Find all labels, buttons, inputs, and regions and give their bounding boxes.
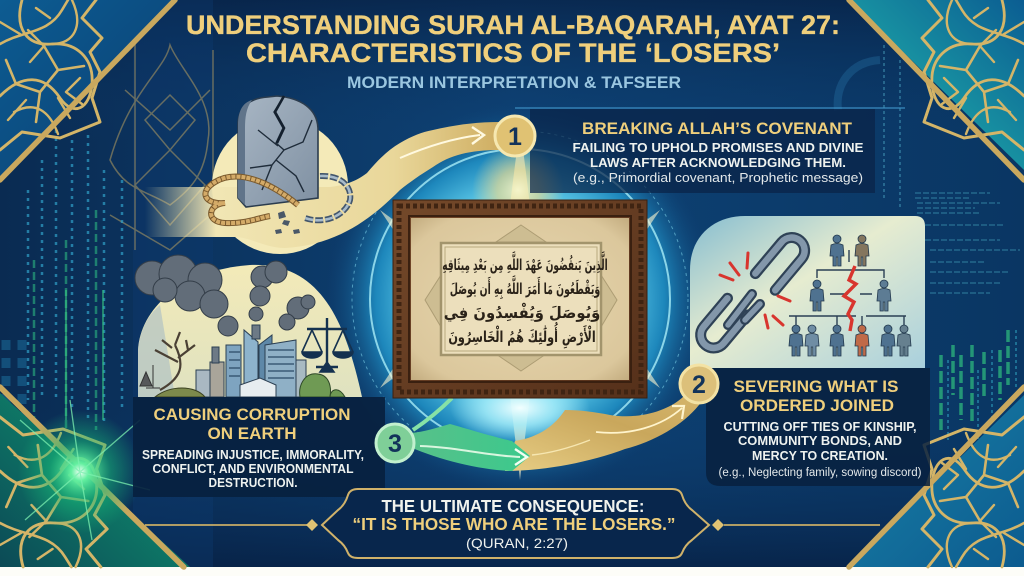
step 1 badge: [495, 116, 535, 156]
arrow: gold ribbon to step 2: [505, 396, 704, 471]
panel: causing corruption: DESTRUCTION.: [208, 476, 298, 490]
subtitle: MODERN INTERPRETATION & TAFSEER: [347, 73, 681, 92]
icon: cracked tablet with rope and chain: [205, 96, 350, 234]
corner ornament: top right: [849, 0, 1024, 180]
verse text: وَيُوصَلَ وَيُفْسِدُونَ فِي: [444, 302, 600, 323]
step 2 badge: 2: [692, 371, 706, 399]
verse text: وَيَقْطَعُونَ مَا أَمَرَ اللَّهُ بِهِ أَن يُوصَلَ: [450, 275, 600, 299]
step 3 badge: [376, 424, 414, 462]
arrow: green ribbon from step 3: [410, 398, 530, 471]
panel: causing corruption: SPREADING INJUSTICE, IMMORALITY,: [142, 448, 364, 462]
digital rain left: [6, 130, 122, 430]
corner ornament: bottom right: [848, 387, 1024, 567]
people: [789, 235, 911, 356]
panel: corruption illustration: [135, 255, 362, 397]
panel: causing corruption: CAUSING CORRUPTION: [154, 405, 350, 424]
arrow: ribbon to step 1: [145, 118, 500, 254]
panel: breaking covenant: (e.g., Primordial covenant, Prophetic message): [573, 170, 863, 185]
red crack: [844, 266, 856, 331]
panel: severing text: ORDERED JOINED: [740, 396, 894, 415]
panel: causing corruption: ON EARTH: [208, 424, 296, 443]
corner ornament: bottom left: [0, 387, 190, 567]
family tree lines: [789, 250, 906, 325]
panel: breaking covenant: FAILING TO UPHOLD PROMISES AND DIVINE: [572, 140, 864, 155]
step 2 badge: [680, 365, 718, 403]
verse text: الْأَرْضِ أُولَٰئِكَ هُمُ الْخَاسِرُونَ: [448, 322, 596, 349]
step 3 badge: 3: [388, 430, 402, 458]
panel: breaking covenant: [515, 108, 905, 193]
icon: broken chain: [695, 232, 810, 353]
panel: causing corruption: [133, 397, 385, 497]
panel: causing corruption: CONFLICT, AND ENVIRONMENTAL: [152, 462, 354, 476]
consequence banner: “IT IS THOSE WHO ARE THE LOSERS.”: [352, 514, 676, 534]
faint arabesque pattern: [110, 40, 213, 250]
panel: severing illustration: [690, 216, 925, 368]
panel: severing text: MERCY TO CREATION.: [752, 449, 888, 463]
consequence banner: [145, 489, 880, 558]
step 1 badge: 1: [508, 123, 522, 151]
consequence banner: (QURAN, 2:27): [466, 535, 568, 551]
central halo: [325, 104, 715, 494]
title: UNDERSTANDING SURAH AL-BAQARAH, AYAT 27:: [186, 10, 840, 40]
framed verse: [393, 200, 647, 398]
smoke clouds: [135, 255, 315, 336]
dead tree: [155, 332, 195, 390]
panel: severing text: (e.g., Neglecting family, sowing discord): [718, 467, 922, 479]
scales of justice: [302, 318, 353, 372]
panel: severing text: SEVERING WHAT IS: [734, 377, 898, 396]
panel: severing text: CUTTING OFF TIES OF KINSHIP,: [724, 420, 916, 434]
city buildings: [196, 325, 306, 397]
small fallen scale: [140, 365, 160, 388]
panel: breaking covenant: BREAKING ALLAH’S COVENANT: [582, 119, 853, 138]
verse ornaments: [425, 225, 617, 371]
verse text: [442, 251, 608, 349]
title: [186, 10, 840, 68]
digital code right: [838, 45, 1020, 440]
panel: breaking covenant: LAWS AFTER ACKNOWLEDGING THEM.: [590, 155, 846, 170]
consequence banner: THE ULTIMATE CONSEQUENCE:: [382, 496, 644, 516]
green trees: [300, 374, 330, 397]
corner ornament: top left: [0, 0, 175, 180]
verse text: الَّذِينَ يَنقُضُونَ عَهْدَ اللَّهِ مِن بَعْدِ مِيثَاقِهِ: [442, 251, 608, 274]
panel: severing text: [706, 368, 930, 486]
title: CHARACTERISTICS OF THE ‘LOSERS’: [246, 38, 780, 68]
green starburst: [18, 400, 150, 540]
panel: severing text: COMMUNITY BONDS, AND: [738, 434, 902, 448]
